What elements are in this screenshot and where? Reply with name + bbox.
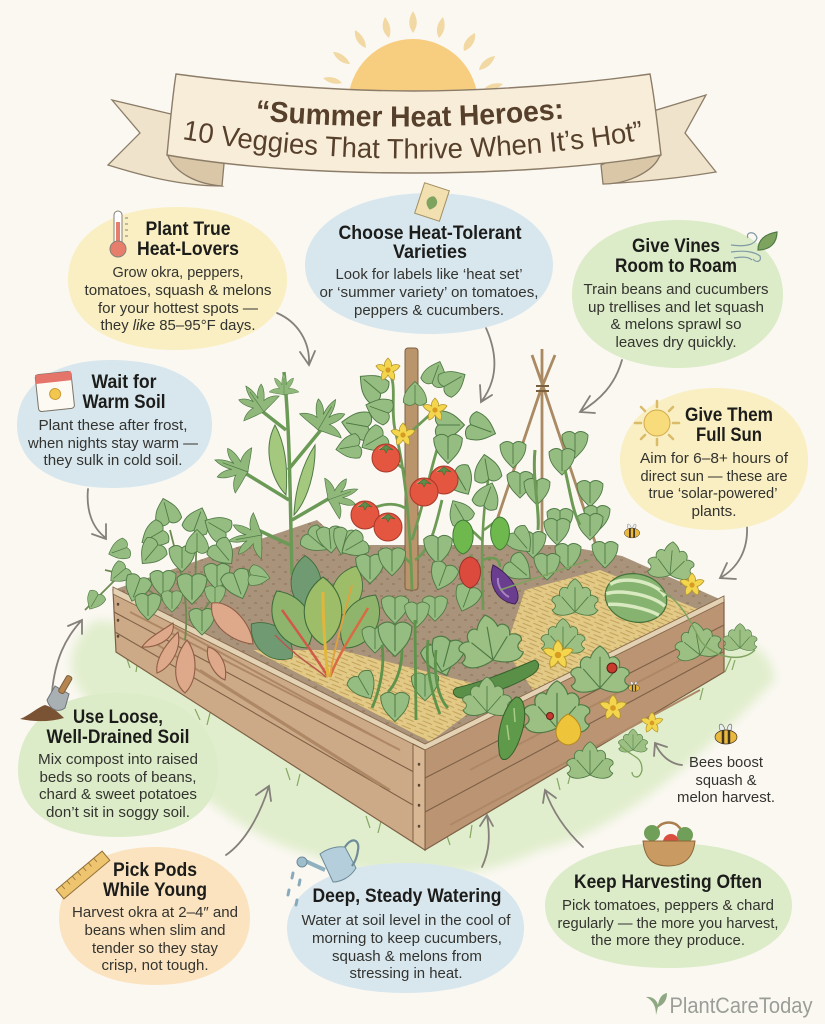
- bee note: Bees boost: [689, 754, 764, 771]
- callout: keep harvesting often: Pick tomatoes, peppers & chard: [562, 897, 774, 914]
- icon: wind and leaf: [731, 232, 777, 261]
- corner post: [413, 744, 425, 850]
- callout: give them full sun: Aim for 6–8+ hours of: [640, 450, 789, 467]
- callout: plant true heat-lovers: Plant True: [146, 219, 230, 240]
- callout: pick pods while young: tender so they stay: [92, 940, 218, 957]
- callout: give them full sun: direct sun — these are: [640, 468, 788, 485]
- callout: deep steady watering: morning to keep cucumbers,: [312, 930, 502, 947]
- callout: give vines room to roam: Room to Roam: [615, 256, 737, 277]
- callout: deep steady watering: squash & melons from: [332, 948, 482, 965]
- straw mulch front: [253, 650, 500, 742]
- bee note: melon harvest.: [677, 789, 775, 806]
- callout: pick pods while young: Harvest okra at 2–4″ and: [72, 904, 238, 921]
- icon: bee: [715, 724, 737, 744]
- callout: give them full sun: [620, 388, 808, 530]
- icon: watering can: [288, 840, 358, 905]
- callout: deep steady watering: Water at soil level in the cool of: [302, 912, 511, 929]
- ribbon fold left: [168, 154, 224, 186]
- arrow: watering: [480, 815, 493, 867]
- callout: keep harvesting often: [545, 822, 792, 968]
- ribbon right tail: [603, 95, 716, 184]
- title line one: “Summer Heat Heroes:: [258, 100, 562, 127]
- callout: wait for warm soil: Plant these after frost,: [38, 417, 188, 434]
- arrow: warm soil: [88, 489, 106, 539]
- arrow: bees note: [654, 743, 682, 765]
- callout: give vines room to roam: [572, 220, 783, 368]
- callout: deep steady watering: stressing in heat.: [350, 965, 462, 982]
- callout: pick pods while young: Pick Pods: [113, 860, 197, 881]
- callout: give them full sun: plants.: [692, 503, 736, 520]
- callout: choose heat-tolerant varieties: Choose Heat-Tolerant: [338, 223, 522, 244]
- callout: use loose well-drained soil: Use Loose,: [73, 707, 163, 728]
- callout: give vines room to roam: & melons sprawl so: [610, 316, 742, 333]
- arrow: harvesting: [543, 790, 583, 847]
- pepper and eggplant plant: [442, 452, 540, 616]
- seedling: [298, 523, 371, 564]
- callout: deep steady watering: [287, 840, 524, 993]
- callout: use loose well-drained soil: Mix compost into raised: [38, 751, 198, 768]
- arrow: vines: [580, 360, 622, 413]
- sun: [323, 11, 503, 169]
- bamboo trellis with beans: [497, 349, 618, 580]
- bush bean plant: [345, 596, 467, 722]
- okra plant: [207, 372, 365, 575]
- melon: [601, 568, 671, 628]
- soil fill: [113, 520, 724, 748]
- icon: seed packet: [415, 183, 449, 221]
- callout: use loose well-drained soil: beds so roots of beans,: [40, 769, 196, 786]
- callout: give vines room to roam: Give Vines: [632, 236, 720, 257]
- callout: wait for warm soil: Wait for: [92, 372, 157, 393]
- title ribbon: [106, 73, 718, 187]
- bed left face: [113, 590, 425, 850]
- icon: thermometer: [110, 211, 128, 257]
- vine flowers: [543, 640, 573, 668]
- callout: give them full sun: true ‘solar-powered’: [648, 485, 778, 502]
- grass under the bed: [71, 620, 775, 877]
- callout: give vines room to roam: leaves dry quickly.: [616, 334, 736, 351]
- callout: choose heat-tolerant varieties: [305, 183, 553, 334]
- callout: plant true heat-lovers: [68, 207, 287, 350]
- cucumber: [498, 697, 525, 760]
- callout: pick pods while young: While Young: [103, 880, 207, 901]
- callout: keep harvesting often: regularly — the more you harvest,: [558, 915, 778, 932]
- sweet potato plant: [82, 495, 272, 693]
- bee near trellis: [624, 524, 640, 538]
- icon: calendar: [35, 371, 75, 412]
- callout: choose heat-tolerant varieties: peppers & cucumbers.: [354, 302, 504, 319]
- callout: keep harvesting often: Keep Harvesting Often: [574, 872, 762, 893]
- callout: use loose well-drained soil: chard & sweet potatoes: [39, 786, 197, 803]
- tomato plant: [334, 357, 500, 594]
- bed top rim: [113, 587, 724, 750]
- arrow: full sun: [720, 527, 747, 579]
- icon: trowel in soil: [20, 675, 73, 721]
- callout: plant true heat-lovers: Heat-Lovers: [137, 239, 239, 260]
- arrows: [52, 313, 747, 867]
- ladybugs: [607, 663, 617, 673]
- raised wooden bed: [113, 520, 724, 850]
- yellow squash: [556, 714, 581, 745]
- callout: pick pods while young: crisp, not tough.: [102, 957, 208, 974]
- bee over squash: [628, 682, 640, 692]
- callout: pick pods while young: [56, 847, 250, 985]
- callout: plant true heat-lovers: Grow okra, peppers,: [112, 264, 244, 281]
- callout: deep steady watering: Deep, Steady Watering: [312, 886, 502, 907]
- icon: ruler: [56, 851, 110, 899]
- arrow: loose soil: [52, 620, 82, 692]
- callout: give them full sun: Full Sun: [696, 425, 762, 446]
- callout: use loose well-drained soil: Well-Drained Soil: [46, 727, 190, 748]
- title line two: 10 Veggies That Thrive When It’s Hot”: [184, 120, 640, 158]
- icon: harvest basket: [643, 822, 695, 866]
- callout: wait for warm soil: when nights stay warm —: [27, 435, 198, 452]
- melon and squash vines: [453, 540, 757, 778]
- callout: give vines room to roam: Train beans and cucumbers: [584, 281, 768, 298]
- sweet potato tubers: [142, 603, 253, 693]
- tomato flowers: [376, 358, 400, 380]
- callout: plant true heat-lovers: tomatoes, squash & melons: [84, 282, 272, 299]
- second cucumber: [453, 660, 539, 698]
- arrow: pods: [226, 786, 271, 855]
- bee note: [677, 724, 775, 806]
- straw mulch right: [505, 570, 700, 700]
- bed right face: [425, 600, 724, 850]
- ribbon main band: [167, 74, 661, 173]
- callout: use loose well-drained soil: don’t sit in soggy soil.: [46, 804, 190, 821]
- callout: wait for warm soil: [17, 360, 212, 488]
- arrow: varieties: [480, 328, 494, 402]
- callout: use loose well-drained soil: [18, 675, 218, 837]
- nails: [118, 604, 419, 826]
- arrow: heat lovers: [277, 313, 315, 365]
- callout: plant true heat-lovers: they like 85–95°F days.: [100, 317, 256, 334]
- icon: sun: [635, 401, 679, 445]
- ribbon left tail: [108, 100, 222, 186]
- callout: keep harvesting often: the more they produce.: [591, 932, 745, 949]
- callout: give vines room to roam: up trellises and let squash: [588, 299, 764, 316]
- plank lines: [114, 612, 724, 812]
- callout: choose heat-tolerant varieties: Look for labels like ‘heat set’: [336, 266, 522, 283]
- callout: give them full sun: Give Them: [685, 405, 773, 426]
- chard: [242, 555, 390, 677]
- callout: choose heat-tolerant varieties: Varieties: [393, 242, 467, 263]
- tomatoes: [372, 444, 400, 472]
- callout: wait for warm soil: Warm Soil: [82, 392, 166, 413]
- bee note: squash &: [696, 772, 756, 789]
- logo: PlantCareToday: [670, 993, 812, 1018]
- callout: wait for warm soil: they sulk in cold soil.: [44, 452, 182, 469]
- ribbon fold right: [601, 153, 660, 184]
- callout: plant true heat-lovers: for your hottest spots —: [98, 300, 258, 317]
- callout: pick pods while young: beans when slim and: [84, 922, 226, 939]
- callout: choose heat-tolerant varieties: or ‘summer variety’ on tomatoes,: [320, 284, 538, 301]
- stake: [405, 348, 418, 590]
